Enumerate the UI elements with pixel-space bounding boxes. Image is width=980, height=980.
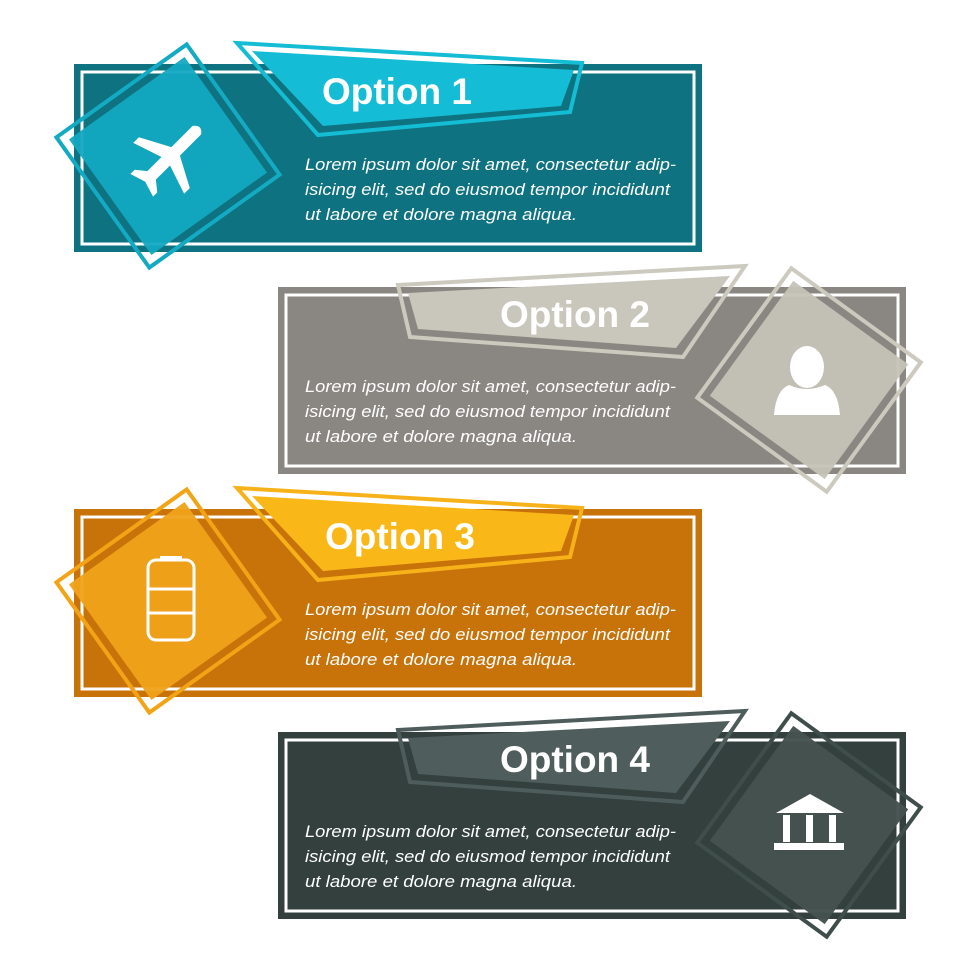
text: option 2 body: isicing elit, sed do eiusmod tempor incididunt	[305, 402, 671, 421]
text: option 1 body: Lorem ipsum dolor sit amet, consectetur adip-	[305, 155, 676, 174]
panel: option 3	[56, 488, 702, 713]
panel: option 2	[278, 266, 921, 492]
icon: airplane	[116, 102, 225, 211]
text: option 4 body: ut labore et dolore magna aliqua.	[305, 872, 577, 891]
icon diamond: option 3	[56, 489, 280, 713]
icon diamond: option 4	[697, 713, 921, 937]
text: option 4 body: isicing elit, sed do eiusmod tempor incididunt	[305, 847, 671, 866]
label: Option 4: Option 4	[500, 739, 650, 780]
icon: battery	[148, 556, 194, 640]
icon diamond: option 2	[697, 268, 921, 492]
label: Option 1: Option 1	[322, 71, 472, 112]
panel: option 4	[278, 711, 921, 937]
label: Option 1	[237, 43, 582, 135]
text: option 3 body: isicing elit, sed do eiusmod tempor incididunt	[305, 625, 671, 644]
icon diamond: option 1	[56, 44, 280, 268]
text: option 4 body: Lorem ipsum dolor sit amet, consectetur adip-	[305, 822, 676, 841]
icon: bank	[774, 794, 844, 850]
label: Option 2	[398, 266, 745, 357]
label: Option 3: Option 3	[325, 516, 475, 557]
text: option 3 body: Lorem ipsum dolor sit amet, consectetur adip-	[305, 600, 676, 619]
text: option 1 body: isicing elit, sed do eiusmod tempor incididunt	[305, 180, 671, 199]
label: Option 2: Option 2	[500, 294, 650, 335]
text: option 2 body: Lorem ipsum dolor sit amet, consectetur adip-	[305, 377, 676, 396]
panel: option 1	[56, 43, 702, 268]
label: Option 4	[398, 711, 745, 802]
text: option 1 body: ut labore et dolore magna aliqua.	[305, 205, 577, 224]
text: option 3 body: ut labore et dolore magna aliqua.	[305, 650, 577, 669]
icon: person	[774, 346, 840, 415]
text: option 2 body: ut labore et dolore magna aliqua.	[305, 427, 577, 446]
label: Option 3	[237, 488, 582, 580]
